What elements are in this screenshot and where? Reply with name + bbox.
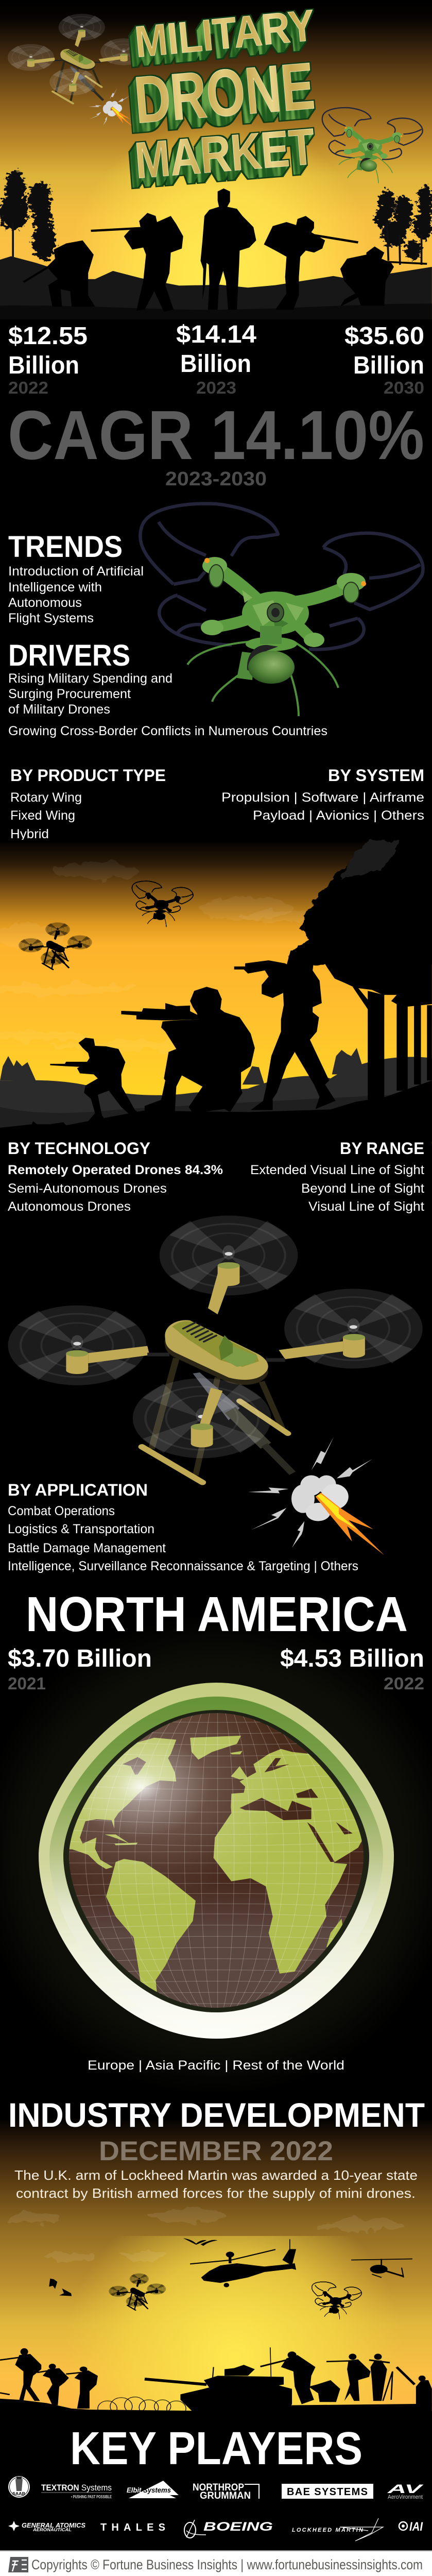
logo: AeroVironment: AV <box>387 2482 424 2496</box>
logo: Northrop Grumman: NORTHROP <box>193 2482 244 2493</box>
title: MARKET <box>133 117 317 189</box>
panel: sunset soldiers scene <box>0 822 432 1152</box>
text block: trends: Intelligence with <box>8 580 102 595</box>
icon: Fortune Business Insights logo <box>8 2557 28 2572</box>
segment: by range: BY RANGE <box>340 1139 424 1158</box>
text block: drivers: Growing Cross-Border Conflicts in Numerous Countries <box>8 724 327 738</box>
icon: green camera drone large <box>140 503 423 716</box>
icon: muzzle flash <box>248 1436 384 1555</box>
title: DRONE <box>131 48 317 138</box>
segment: by technology <box>8 1139 223 1214</box>
stat: North America 2021: 2021 <box>8 1674 46 1693</box>
text block: drivers: DRIVERS <box>8 639 130 672</box>
segment: by range <box>250 1139 424 1214</box>
logo: Saab: SAAB <box>12 2492 25 2496</box>
stat: North America 2021: $3.70 Billion <box>8 1645 152 1672</box>
text block: trends: Flight Systems <box>8 611 94 625</box>
logo: BAE Systems: BAE SYSTEMS <box>287 2486 368 2498</box>
icon: large camouflage gun drone <box>8 1215 423 1482</box>
soldiers and hills <box>0 938 432 1152</box>
text block: trends: Autonomous <box>8 596 82 610</box>
logo: General Atomics: AERONAUTICAL <box>32 2527 72 2532</box>
icon: battlefield silhouette camouflage drone <box>109 2274 166 2310</box>
heading: key players: KEY PLAYERS <box>70 2423 362 2475</box>
stat: 2023 market size: Billion <box>180 350 251 378</box>
text block: development description: contract by British armed forces for the supply of mini drones. <box>16 2185 416 2201</box>
text: other regions: Europe | Asia Pacific | Rest of the World <box>88 2058 344 2073</box>
logo: Elbit Systems <box>127 2481 179 2498</box>
segment: by system: Payload | Avionics | Others <box>253 808 424 823</box>
stat: 2022 market size <box>8 323 88 397</box>
logo: IAI <box>399 2520 423 2534</box>
icon: camouflage gun drone <box>8 14 147 128</box>
segment: by application: Battle Damage Management <box>8 1541 166 1555</box>
text block: drivers: Surging Procurement <box>8 687 131 701</box>
logo: Textron Systems: TEXTRON Systems <box>41 2483 112 2493</box>
text block: drivers <box>8 639 327 738</box>
segment: by technology: Autonomous Drones <box>8 1199 131 1214</box>
segment: by range: Extended Visual Line of Sight <box>250 1163 424 1177</box>
text block: trends: Introduction of Artificial <box>8 564 144 579</box>
text block: drivers: Rising Military Spending and <box>8 671 172 686</box>
stat: North America 2022: 2022 <box>384 1674 424 1693</box>
stat: 2023 market size: $14.14 <box>176 321 256 348</box>
subheading: date: DECEMBER 2022 <box>99 2136 333 2166</box>
segment: by application: Combat Operations <box>8 1504 115 1518</box>
icon: silhouette camouflage drone <box>19 922 92 970</box>
segment: by product type: Rotary Wing <box>10 790 82 805</box>
segment: by application: Logistics & Transportation <box>8 1522 154 1536</box>
logo: Lockheed Martin: LOCKHEED MARTIN <box>292 2527 364 2533</box>
stat: 2030 market size: Billion <box>353 352 424 379</box>
title: MILITARY <box>133 1 317 67</box>
logo: Textron Systems <box>41 2483 112 2499</box>
segment: by technology: BY TECHNOLOGY <box>8 1139 150 1158</box>
logo: Saab <box>8 2476 30 2498</box>
panel: battlefield scene <box>0 2117 432 2432</box>
icon: battlefield silhouette green drone <box>312 2282 361 2319</box>
segment: by application: Intelligence, Surveillance Reconnaissance & Targeting | Others <box>8 1559 358 1573</box>
clouds <box>0 862 340 1050</box>
segment: by product type: BY PRODUCT TYPE <box>10 766 166 785</box>
footer <box>0 2550 432 2576</box>
segment: by product type <box>10 766 166 841</box>
stat: 2030 market size: 2030 <box>384 378 424 397</box>
segment: by range: Visual Line of Sight <box>308 1199 424 1214</box>
icon: green camera drone small <box>322 108 423 183</box>
segment: by system: BY SYSTEM <box>328 766 424 785</box>
logo: Lockheed Martin <box>292 2518 383 2541</box>
heading: North America: NORTH AMERICA <box>26 1587 408 1642</box>
logo: AeroVironment <box>387 2482 424 2500</box>
segment: by product type: Fixed Wing <box>10 808 75 823</box>
panel: hero sunset scene <box>0 0 432 319</box>
logo: AeroVironment: AeroVironment <box>388 2494 423 2500</box>
logo: BAE Systems <box>282 2484 373 2499</box>
segment: by technology: Remotely Operated Drones 84.3% <box>8 1163 223 1177</box>
logo: Elbit Systems: Elbit Systems <box>127 2486 171 2494</box>
background glow <box>0 1602 432 2117</box>
logo: General Atomics: GENERAL ATOMICS <box>22 2521 85 2529</box>
stat: 2023 market size: 2023 <box>196 378 236 397</box>
stat: North America 2021 <box>8 1645 152 1693</box>
stat: 2022 market size: 2022 <box>8 378 48 397</box>
title <box>131 1 317 189</box>
logo: IAI: IAI <box>409 2520 423 2534</box>
text block: drivers: of Military Drones <box>8 702 110 717</box>
segment: by product type: Hybrid <box>10 827 49 841</box>
segment: by system: Propulsion | Software | Airframe <box>221 790 424 805</box>
icon: silhouette green drone <box>132 881 193 927</box>
stat: 2022 market size: $12.55 <box>8 323 88 350</box>
logo: General Atomics <box>8 2521 85 2532</box>
logo: Thales: THALES <box>100 2522 165 2533</box>
stat: North America 2022: $4.53 Billion <box>280 1645 424 1672</box>
stat: 2022 market size: Billion <box>8 352 79 379</box>
segment: by application: BY APPLICATION <box>8 1481 148 1499</box>
silhouettes: helicopters, birds, tank and soldiers <box>0 2238 432 2417</box>
clouds <box>8 2209 402 2262</box>
logo: Textron Systems: • PUSHING PAST POSSIBLE <box>71 2495 112 2499</box>
stat: 2030 market size: $35.60 <box>344 323 424 350</box>
text block: trends <box>8 530 144 625</box>
text block: development description: The U.K. arm of Lockheed Martin was awarded a 10-year state <box>14 2167 418 2183</box>
logo: Northrop Grumman <box>193 2482 259 2501</box>
stat: 2030 market size <box>344 323 424 397</box>
tree canopy <box>289 822 432 965</box>
segment: by range: Beyond Line of Sight <box>301 1181 424 1196</box>
text block: development description <box>14 2167 418 2201</box>
logo: Boeing: BOEING <box>203 2520 273 2534</box>
segment: by system <box>221 766 424 823</box>
segment: by application <box>8 1481 358 1573</box>
segment: by technology: Semi-Autonomous Drones <box>8 1181 167 1196</box>
stat: CAGR: 2023-2030 <box>165 468 267 490</box>
text block: trends: TRENDS <box>8 530 123 564</box>
logo: Northrop Grumman: GRUMMAN <box>200 2490 251 2501</box>
stat: North America 2022 <box>280 1645 424 1693</box>
logo: Boeing <box>184 2520 273 2538</box>
hero silhouettes: trees and soldiers <box>0 170 432 319</box>
globe <box>39 1683 394 2039</box>
stat: 2023 market size <box>176 321 256 397</box>
